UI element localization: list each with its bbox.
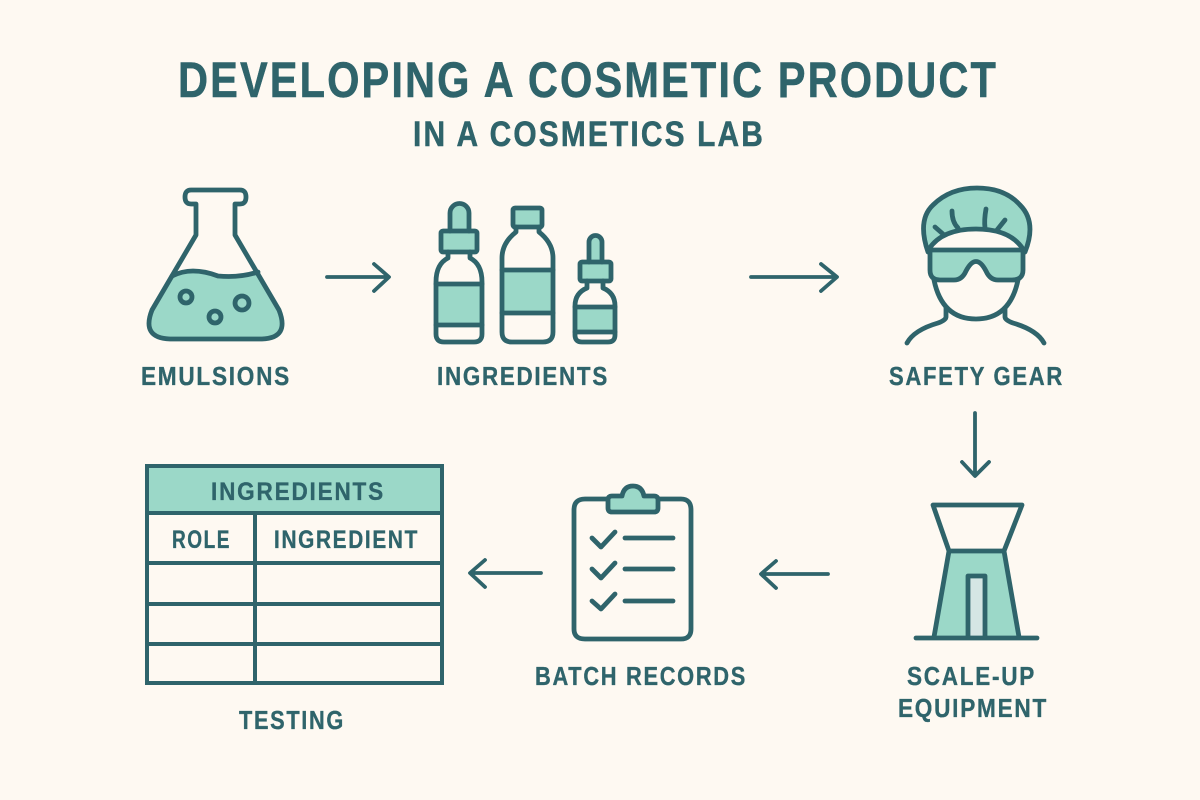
column header: role: ROLE xyxy=(172,526,231,554)
icon: clipboard checklist xyxy=(574,486,691,639)
panel: batch records xyxy=(535,486,747,691)
arrow: emulsions to ingredients xyxy=(327,264,389,291)
panel: scale-up equipment xyxy=(898,505,1048,723)
icon: dropper bottle large xyxy=(436,204,482,342)
table header: ingredients: INGREDIENTS xyxy=(211,478,385,506)
icon: dropper bottle small xyxy=(575,236,615,342)
icon: bottle medium xyxy=(502,208,553,342)
label: safety gear: SAFETY GEAR xyxy=(889,361,1064,391)
label: batch records: BATCH RECORDS xyxy=(535,661,747,691)
panel: testing xyxy=(147,466,442,735)
label: scale-up: SCALE-UP xyxy=(907,661,1036,691)
label: emulsions: EMULSIONS xyxy=(141,361,291,391)
icon: person with hair net and goggles xyxy=(907,188,1044,343)
panel: safety gear xyxy=(889,188,1064,391)
panel: ingredients xyxy=(436,204,615,391)
icon: scale-up machine xyxy=(916,505,1037,638)
title: DEVELOPING A COSMETIC PRODUCT xyxy=(178,52,998,108)
column header: ingredient: INGREDIENT xyxy=(274,526,419,554)
arrow: ingredients to safety gear xyxy=(751,264,837,291)
arrow: safety gear to scale-up equipment xyxy=(962,413,989,476)
subtitle: IN A COSMETICS LAB xyxy=(413,115,765,154)
table: ingredients xyxy=(147,466,442,683)
label: testing: TESTING xyxy=(239,705,345,735)
label: ingredients: INGREDIENTS xyxy=(437,361,609,391)
label: equipment: EQUIPMENT xyxy=(898,693,1048,723)
arrow: scale-up equipment to batch records xyxy=(761,561,828,588)
icon: flask xyxy=(149,190,282,339)
arrow: batch records to testing xyxy=(470,560,541,587)
panel: emulsions xyxy=(141,190,291,391)
